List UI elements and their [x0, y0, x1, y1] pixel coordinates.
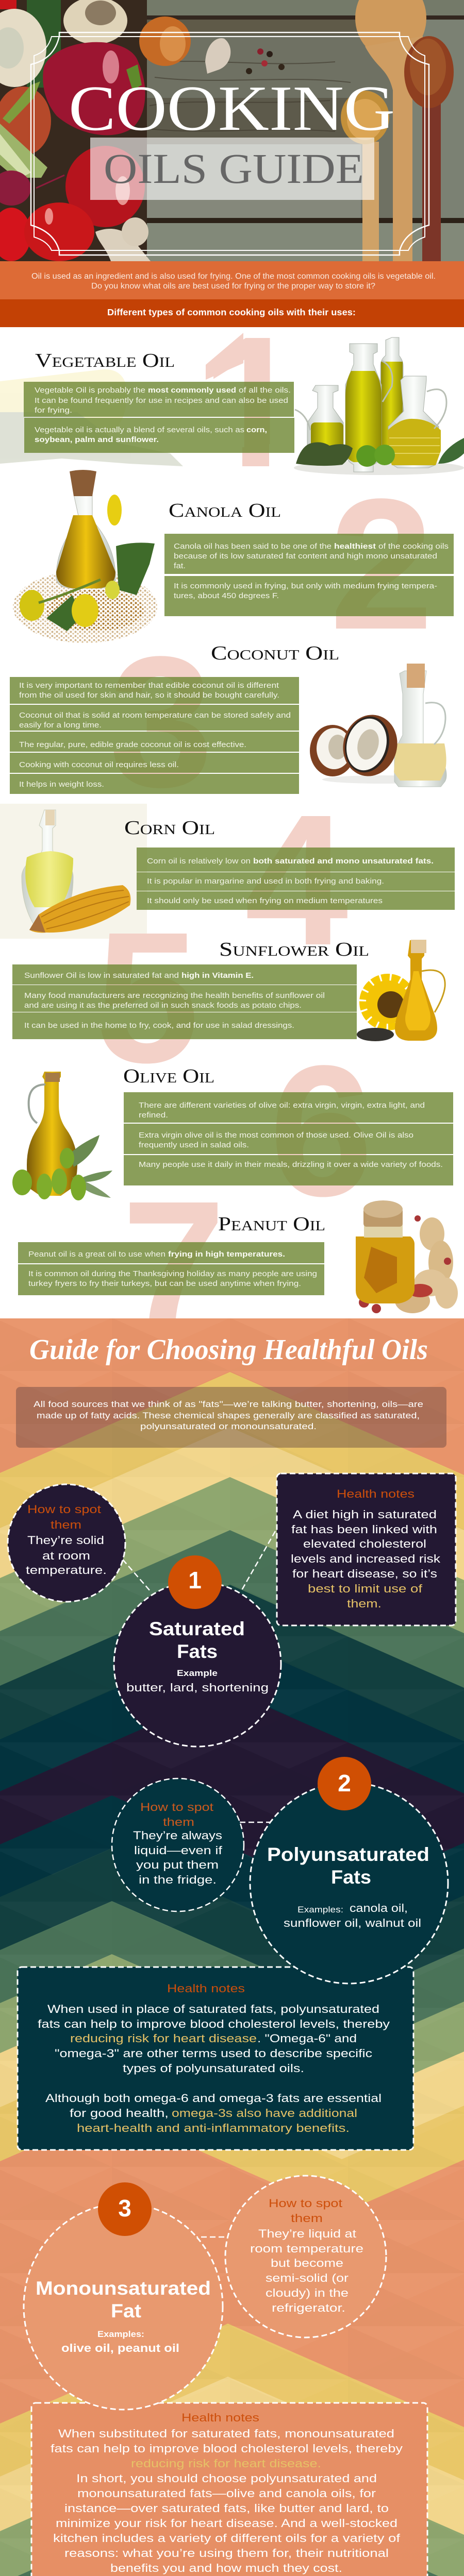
heading: Corn Oil [124, 817, 215, 839]
main bubble [24, 2204, 223, 2410]
main bubble: sunflower oil, walnut oil [284, 1917, 421, 1929]
how to spot bubble: cloudy) in the [266, 2286, 349, 2299]
big number 1: 1 [201, 297, 305, 506]
info box 1: because of its low saturated fat content and high mono unsaturated [174, 552, 437, 561]
info box 2 [124, 1124, 453, 1154]
sunflower image [357, 940, 445, 1041]
how to spot bubble: them [291, 2212, 323, 2225]
health notes box: In short, you should choose polyunsaturated and [76, 2472, 377, 2485]
panel: corn oil [0, 775, 455, 984]
info box 3: The regular, pure, edible grade coconut oil is cost effective. [19, 741, 246, 749]
health notes box: minimize your risk for heart disease. And a well-stocked [56, 2517, 397, 2530]
info box 1: It is very important to remember that edible coconut oil is different [19, 682, 279, 690]
info box 1: Canola oil has been said to be one of the [174, 543, 332, 551]
how to spot bubble [8, 1484, 125, 1602]
health notes box: them. [347, 1597, 382, 1610]
info box 2: turkey fryers to fry their turkeys, but can be used anytime when frying. [28, 1280, 301, 1288]
heading: Olive Oil [123, 1065, 214, 1087]
how to spot bubble: at room [42, 1549, 90, 1562]
info box 2 [10, 705, 299, 731]
polyunsaturated fats group [18, 1757, 448, 2150]
health notes box: for heart disease, so it’s [292, 1567, 437, 1580]
info box 1: There are different varieties of olive oil: extra virgin, virgin, extra light, and [139, 1101, 425, 1110]
main bubble [250, 1783, 448, 1984]
subheading band: Different types of common cooking oils with their uses: [107, 307, 356, 317]
info box 2: corn, [246, 426, 267, 434]
connector [192, 2236, 226, 2238]
big number 6: 6 [269, 1026, 373, 1235]
hero frame [31, 32, 429, 255]
info box 2 [12, 985, 357, 1012]
how to spot bubble: them [51, 1518, 81, 1531]
health notes box [31, 2403, 427, 2576]
how to spot bubble: semi-solid (or [266, 2272, 349, 2284]
corn image [0, 804, 147, 939]
info box 1: Sunflower Oil is low in saturated fat and [24, 972, 179, 980]
info box 3 [124, 1155, 453, 1185]
how to spot bubble: They’re always [133, 1829, 222, 1842]
main bubble: olive oil, peanut oil [61, 2342, 179, 2354]
how to spot bubble: but become [271, 2257, 343, 2269]
info box 2: frequently used in salad oils. [139, 1141, 249, 1149]
panel: vegetable oil [0, 297, 464, 506]
health notes box: Health notes [167, 1982, 245, 1995]
health notes box: When used in place of saturated fats, polyunsaturated [47, 2003, 379, 2015]
how to spot bubble: room temperature [250, 2242, 363, 2255]
info box 2: Extra virgin olive oil is the most common of those used. Olive Oil is also [139, 1131, 413, 1140]
big number 5: 5 [95, 893, 200, 1101]
health notes box: Health notes [181, 2411, 259, 2424]
connectors [123, 1531, 275, 1592]
main bubble: Fat [111, 2300, 141, 2321]
health notes box [277, 1473, 456, 1625]
info box 2 [137, 872, 455, 891]
health notes box [18, 1967, 413, 2150]
info box 1: refined. [139, 1111, 168, 1120]
health notes box: best to limit use of [308, 1582, 423, 1595]
number badge 1 [168, 1555, 222, 1609]
info box 4: Cooking with coconut oil requires less oil. [19, 761, 179, 769]
intro band: Oil is used as an ingredient and is also used for frying. One of the most common cooking oils is vegetable oil. [31, 272, 436, 281]
info box 1: Corn oil is relatively low on [147, 857, 251, 866]
subheading band [0, 299, 464, 327]
how to spot bubble: refrigerator. [272, 2301, 345, 2314]
info box 1: most commonly used [148, 386, 236, 395]
info box 1 [124, 1092, 453, 1123]
panel: olive oil [12, 1026, 453, 1235]
info box 5 [10, 774, 299, 794]
info box 2: easily for a long time. [19, 721, 102, 730]
number badge 2 [318, 1757, 371, 1810]
info box 2: soybean, palm and sunflower. [35, 436, 159, 444]
info box 2: It is popular in margarine and used in both frying and baking. [147, 877, 384, 886]
white background for oil list [0, 327, 464, 1318]
health notes box: levels and increased risk [291, 1552, 441, 1565]
intro text box: polyunsaturated or monounsaturated. [140, 1421, 317, 1431]
oil bottles image [294, 337, 464, 475]
info box 3: It can be used in the home to fry, cook, and for use in salad dressings. [24, 1022, 294, 1030]
info box 1: of the cooking oils [378, 543, 449, 551]
info box 2: and are using it as the preferred oil in such snack foods as potato chips. [24, 1002, 302, 1010]
info box 3 [10, 732, 299, 752]
health notes box: heart-health and anti-inflammatory benefits. [77, 2122, 350, 2134]
how to spot bubble: How to spot [140, 1801, 213, 1814]
how to spot bubble [112, 1778, 244, 1911]
info box 1 [164, 534, 454, 574]
info box 1: frying in high temperatures. [168, 1250, 285, 1259]
info box 1: high in Vitamin E. [181, 972, 254, 980]
info box 3 [12, 1012, 357, 1039]
faded olive oil bottle [0, 369, 183, 466]
health notes box: reasons: what you’re using them for, their nutritional [64, 2547, 389, 2560]
main bubble: Example [177, 1668, 218, 1678]
info box 1: It can be found frequently for use in recipes and can also be used [35, 397, 288, 405]
info box 2: Coconut oil that is solid at room temperature can be stored safely and [19, 711, 291, 720]
how to spot bubble: How to spot [27, 1503, 101, 1516]
number badge 3 [98, 2182, 152, 2236]
health notes box: fat has been linked with [291, 1523, 437, 1536]
main bubble: Examples: [297, 1905, 343, 1914]
heading: Vegetable Oil [35, 350, 175, 371]
chevron background [0, 1318, 464, 2576]
main bubble: Examples: [97, 2329, 144, 2339]
health notes box: kitchen includes a variety of different oils for a variety of [53, 2532, 401, 2545]
olive bottle image [12, 1072, 112, 1200]
health notes box: A diet high in saturated [293, 1508, 437, 1521]
info box 1: both saturated and mono unsaturated fats. [253, 857, 434, 866]
info box 1: from the oil used for skin and hair, so it should be bought carefully. [19, 691, 279, 700]
how to spot bubble: in the fridge. [139, 1873, 217, 1886]
number badge 2: 2 [338, 1770, 351, 1797]
main bubble: Saturated [149, 1618, 245, 1639]
guide heading: Guide for Choosing Healthful Oils [29, 1334, 428, 1366]
big number 2: 2 [329, 460, 434, 668]
health notes box: . "Omega-6" and [257, 2032, 357, 2045]
title box: Oils Guide [90, 138, 374, 200]
big number 7: 7 [122, 1162, 226, 1370]
intro text box: made up of fatty acids. These chemical shapes generally are classified as saturated, [37, 1411, 420, 1420]
info box 1: Vegetable Oil is probably the [35, 386, 145, 395]
info box 2 [164, 576, 454, 616]
info box 2: Many food manufacturers are recognizing the health benefits of sunflower oil [24, 992, 325, 1000]
health notes box: Although both omega-6 and omega-3 fats are essential [45, 2092, 382, 2105]
intro text box [16, 1387, 446, 1448]
main bubble: canola oil, [350, 1902, 408, 1914]
how to spot bubble: temperature. [26, 1564, 107, 1577]
health notes box: instance—over saturated fats, like butter and lard, to [64, 2502, 389, 2515]
monounsaturated fat group [24, 2176, 427, 2576]
health notes box: monounsaturated fats—olive and canola oils, for [77, 2487, 376, 2500]
big number 3: 3 [109, 617, 213, 826]
health notes box: "omega-3" are other terms used to describe specific [55, 2047, 372, 2060]
main bubble [114, 1582, 281, 1747]
health notes box: reducing risk for heart disease [70, 2032, 257, 2045]
how to spot bubble: They’re solid [27, 1534, 104, 1547]
heading: Coconut Oil [211, 642, 339, 664]
how to spot bubble: liquid—even if [134, 1844, 223, 1857]
health notes box: fats can help to improve blood cholesterol levels, thereby [38, 2018, 390, 2030]
coconut bottle image [310, 664, 446, 787]
how to spot bubble: They’re liquid at [258, 2227, 356, 2240]
info box 3 [137, 891, 455, 910]
health notes box: types of polyunsaturated oils. [123, 2062, 304, 2075]
health notes box: reducing risk for heart disease. [131, 2457, 321, 2470]
info box 5: It helps in weight loss. [19, 781, 104, 789]
info box 2 [18, 1264, 324, 1295]
info box 2: tures, about 450 degrees F. [174, 592, 279, 600]
health notes box: for good health, [70, 2107, 169, 2120]
connector [240, 1822, 272, 1823]
info box 2: It is commonly used in frying, but only with medium frying tempera- [174, 582, 437, 590]
health notes box: benefits you and how much they cost. [110, 2562, 342, 2574]
panel: coconut oil [10, 617, 446, 826]
info box 1: fat. [174, 562, 186, 570]
saturated fats group [8, 1473, 456, 1747]
info box 4 [10, 753, 299, 773]
number badge 1: 1 [188, 1567, 202, 1594]
health notes box: elevated cholesterol [303, 1537, 426, 1550]
main bubble: Fats [331, 1867, 371, 1888]
panel: sunflower oil [12, 893, 445, 1101]
peanut image [356, 1200, 458, 1313]
how to spot bubble: them [163, 1816, 194, 1828]
info box 1 [10, 677, 299, 704]
health notes box: fats can help to improve blood cholesterol levels, thereby [51, 2442, 403, 2455]
canola bottle image [13, 470, 157, 643]
info box 1 [24, 382, 294, 417]
intro text box: All food sources that we think of as "fats"—we’re talking butter, shortening, oils—are [34, 1399, 423, 1409]
info box 1: healthiest [334, 543, 376, 551]
heading: Canola Oil [169, 500, 281, 521]
heading: Peanut Oil [218, 1213, 325, 1235]
health notes box: When substituted for saturated fats, monounsaturated [58, 2427, 394, 2440]
info box 1 [137, 848, 455, 872]
info box 1 [18, 1242, 324, 1263]
intro band [0, 261, 464, 299]
intro band: Do you know what oils are best used for frying or the proper way to store it? [91, 282, 375, 291]
title: Cooking: COOKING [69, 73, 395, 144]
hero: wooden table photo with vegetables and spoons [0, 0, 464, 261]
big number 1 [206, 333, 270, 466]
big number 4: 4 [244, 775, 350, 984]
how to spot bubble: you put them [136, 1858, 219, 1871]
title box: Oils Guide: OILS GUIDE [104, 145, 364, 192]
info box 2 [24, 418, 294, 453]
info box 1: for frying. [35, 406, 72, 415]
info box 1: of all the oils. [239, 386, 291, 395]
info box 2: Vegetable oil is actually a blend of several oils, such as [35, 426, 244, 434]
panel: peanut oil [18, 1162, 458, 1370]
main bubble: Polyunsaturated [267, 1844, 429, 1865]
health notes box: Health notes [337, 1487, 415, 1500]
number badge 3: 3 [118, 2195, 131, 2222]
info box 3: Many people use it daily in their meals, drizzling it over a wide variety of foods. [139, 1161, 443, 1169]
panel: canola oil [13, 460, 454, 668]
info box 2: It is common oil during the Thanksgiving holiday as many people are using [28, 1270, 317, 1278]
how to spot bubble [225, 2176, 386, 2337]
info box 1: Peanut oil is a great oil to use when [28, 1250, 165, 1259]
main bubble: Fats [177, 1641, 218, 1662]
heading: Sunflower Oil [219, 939, 369, 960]
info box 1 [12, 964, 357, 985]
how to spot bubble: How to spot [269, 2197, 342, 2210]
health notes box: omega-3s also have additional [172, 2107, 357, 2120]
info box 3: It should only be used when frying on medium temperatures [147, 897, 383, 905]
main bubble: butter, lard, shortening [126, 1681, 269, 1694]
main bubble: Monounsaturated [36, 2278, 211, 2299]
